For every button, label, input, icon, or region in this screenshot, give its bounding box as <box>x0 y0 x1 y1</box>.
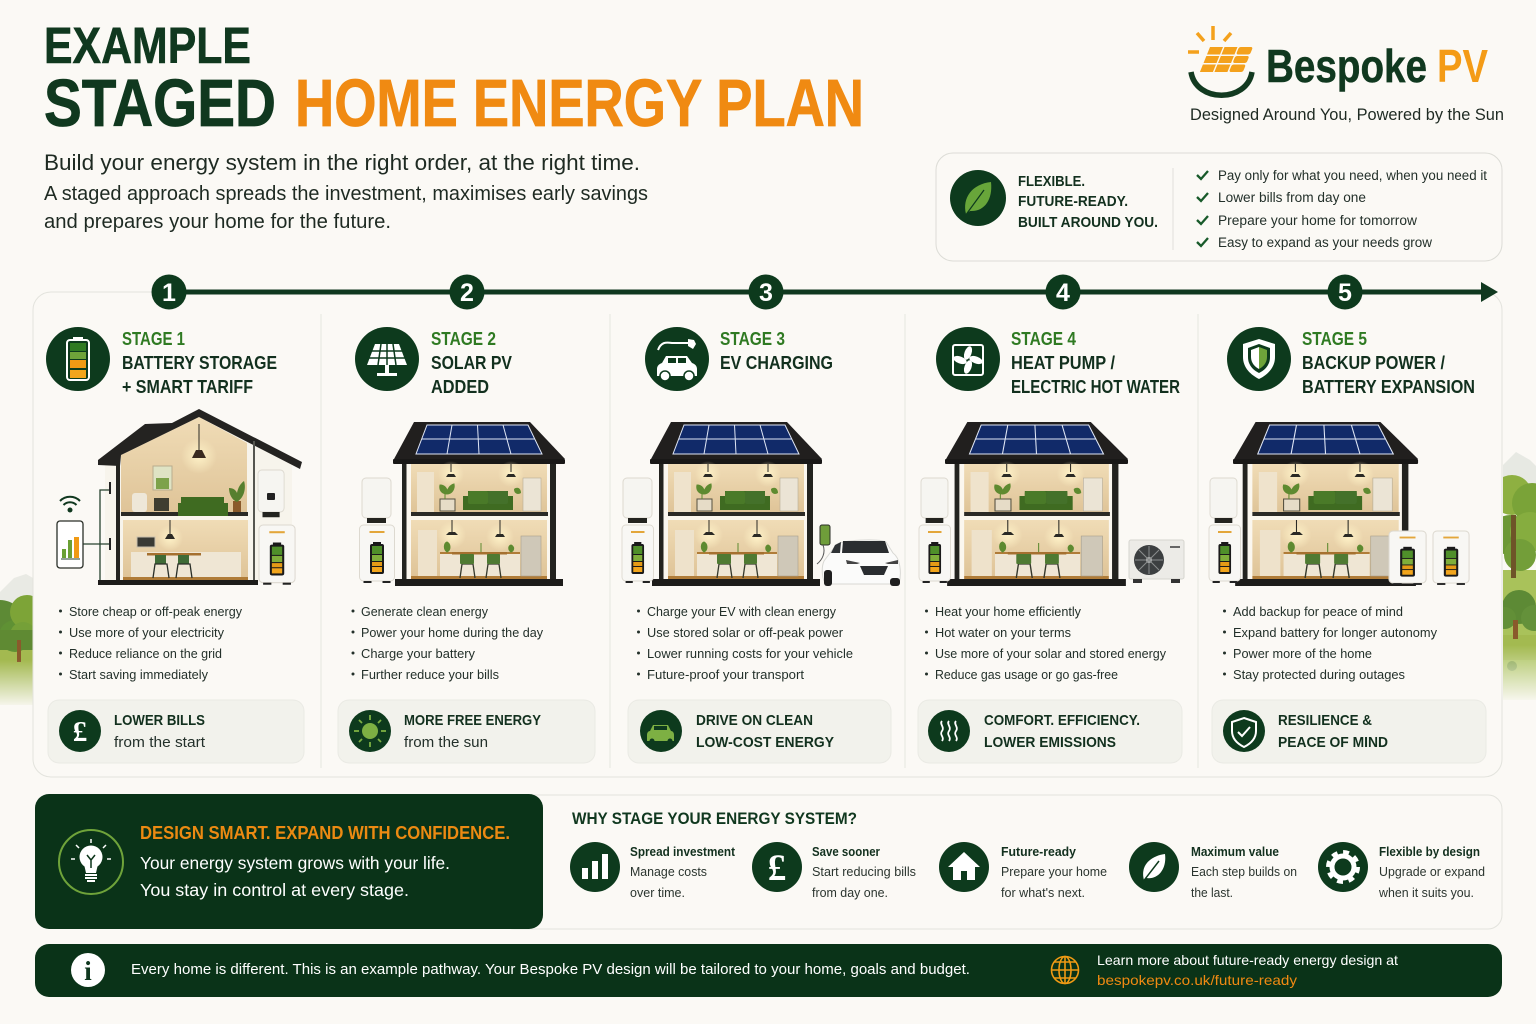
disclaimer text: Every home is different. This is an example pathway. Your Bespoke PV design will be tailored to your home, goals and budget. <box>131 961 970 978</box>
panel: stage 2 <box>338 327 595 763</box>
item: save sooner: Start reducing bills <box>812 865 916 879</box>
callout text: You stay in control at every stage. <box>140 880 409 900</box>
bullet list: Hot water on your terms <box>935 625 1071 640</box>
title: STAGED <box>44 66 276 141</box>
item: spread investment: Spread investment <box>630 845 736 859</box>
benefit: lower bills: LOWER BILLS <box>114 712 205 729</box>
item: save sooner: from day one. <box>812 886 888 900</box>
item: flexible by design <box>1318 842 1485 900</box>
bullet list <box>925 604 1166 682</box>
item: maximum value: the last. <box>1191 886 1233 900</box>
bullet list <box>59 604 242 682</box>
illustration: solar house with extra batteries <box>1209 422 1469 586</box>
benefit: comfort: LOWER EMISSIONS <box>984 734 1116 751</box>
timeline arrow: 2 <box>460 279 474 307</box>
heading: + SMART TARIFF <box>122 377 253 397</box>
bullet list <box>352 604 543 682</box>
icon: info <box>71 953 105 987</box>
icon: EV and charger <box>645 327 709 391</box>
bullet list: Lower running costs for your vehicle <box>647 646 853 661</box>
heading: BATTERY STORAGE <box>122 353 277 373</box>
benefit: lower bills: £ <box>73 716 87 748</box>
heading: STAGE 2 <box>431 329 496 349</box>
icon: solar panel <box>355 327 419 391</box>
item: save sooner: £ <box>768 848 786 889</box>
bullet list: Use stored solar or off-peak power <box>647 625 844 640</box>
benefit: drive on clean <box>628 700 891 763</box>
bullet list <box>1223 604 1437 682</box>
checklist: Pay only for what you need, when you need it <box>1218 168 1487 183</box>
checklist: Easy to expand as your needs grow <box>1218 235 1432 250</box>
benefit: resilience: RESILIENCE & <box>1278 712 1372 729</box>
heading: STAGE 1 <box>122 329 185 349</box>
intro text: and prepares your home for the future. <box>44 210 391 233</box>
landscape: left trees <box>0 574 32 705</box>
bullet list: Reduce reliance on the grid <box>69 646 222 661</box>
heading <box>1011 329 1180 397</box>
bullet list: Expand battery for longer autonomy <box>1233 625 1437 640</box>
intro text: Build your energy system in the right order, at the right time. <box>44 150 640 175</box>
bullet list: Start saving immediately <box>69 667 208 682</box>
heading: WHY STAGE YOUR ENERGY SYSTEM? <box>572 809 857 828</box>
timeline arrow <box>152 274 1498 310</box>
benefit: comfort: COMFORT. EFFICIENCY. <box>984 712 1140 729</box>
item: future-ready <box>939 842 1107 900</box>
benefit: comfort <box>918 700 1182 763</box>
benefit: resilience <box>1212 700 1486 763</box>
callout heading: BUILT AROUND YOU. <box>1018 214 1158 231</box>
benefit: more free energy: MORE FREE ENERGY <box>404 712 541 729</box>
heading: STAGE 5 <box>1302 329 1367 349</box>
item: flexible by design: Flexible by design <box>1379 845 1480 859</box>
heading: ADDED <box>431 377 489 397</box>
callout text <box>140 823 510 900</box>
panel: stages container <box>33 292 1502 777</box>
icon: smartphone with charts <box>57 497 83 568</box>
website link text: Learn more about future-ready energy design at <box>1097 952 1398 968</box>
icon: wall charger <box>817 525 830 564</box>
title: EXAMPLE <box>44 17 251 74</box>
bullet list <box>637 604 853 682</box>
bullet list: Heat your home efficiently <box>935 604 1081 619</box>
item: spread investment: Manage costs <box>630 865 707 879</box>
heading: STAGE 4 <box>1011 329 1076 349</box>
item: future-ready: for what's next. <box>1001 886 1085 900</box>
icon: white car <box>822 540 900 586</box>
panel: stage 4 <box>918 327 1184 763</box>
checklist: Prepare your home for tomorrow <box>1218 213 1417 228</box>
icon: globe <box>1052 956 1078 984</box>
item: maximum value: Maximum value <box>1191 845 1279 859</box>
item: spread investment: over time. <box>630 886 685 900</box>
item: spread investment <box>570 842 736 900</box>
item: maximum value <box>1129 842 1297 900</box>
panel: why stage <box>500 795 1502 929</box>
item: maximum value: Each step builds on <box>1191 865 1297 879</box>
illustration: solar house with battery <box>360 422 565 586</box>
benefit: drive on clean: LOW-COST ENERGY <box>696 734 834 751</box>
tagline: Designed Around You, Powered by the Sun <box>1190 106 1504 124</box>
logo <box>1188 26 1504 124</box>
checklist: Lower bills from day one <box>1218 190 1366 205</box>
illustration: gable house with battery and app <box>57 409 302 585</box>
benefit: lower bills <box>48 700 304 763</box>
illustration: solar house with heat pump <box>919 422 1184 586</box>
illustration: solar house with EV <box>622 422 900 586</box>
bullet list: Charge your EV with clean energy <box>647 604 836 619</box>
heading: ELECTRIC HOT WATER <box>1011 377 1180 397</box>
icon: outdoor heat pump unit <box>1129 540 1184 583</box>
callout text: DESIGN SMART. EXPAND WITH CONFIDENCE. <box>140 823 510 843</box>
icon: shield <box>1227 327 1291 391</box>
bullet list: Stay protected during outages <box>1233 667 1405 682</box>
website link text <box>1097 952 1398 988</box>
item: flexible by design: Upgrade or expand <box>1379 865 1485 879</box>
item: future-ready: Prepare your home <box>1001 865 1107 879</box>
bullet list: Further reduce your bills <box>361 667 499 682</box>
heading <box>431 329 512 397</box>
timeline arrow: 3 <box>759 279 773 307</box>
wordmark: Bespoke <box>1266 40 1427 92</box>
benefit: resilience: PEACE OF MIND <box>1278 734 1388 751</box>
item: save sooner <box>752 842 916 900</box>
timeline arrow: 1 <box>162 279 176 307</box>
benefit: lower bills: from the start <box>114 734 206 751</box>
item: save sooner: Save sooner <box>812 845 880 859</box>
bullet list: Charge your battery <box>361 646 475 661</box>
callout heading: FLEXIBLE. <box>1018 173 1085 190</box>
logo: PV <box>1437 40 1488 92</box>
callout heading: FUTURE-READY. <box>1018 193 1128 210</box>
bullet list: Use more of your electricity <box>69 625 224 640</box>
item: future-ready: Future-ready <box>1001 845 1076 859</box>
icon: info: i <box>84 956 92 986</box>
benefit: more free energy: from the sun <box>404 734 488 751</box>
checklist <box>1197 168 1487 250</box>
bullet list: Add backup for peace of mind <box>1233 604 1403 619</box>
intro text: A staged approach spreads the investment, maximises early savings <box>44 182 648 205</box>
timeline arrow: 4 <box>1056 279 1070 307</box>
panel: footer bar <box>35 944 1502 997</box>
bullet list: Generate clean energy <box>361 604 488 619</box>
bullet list: Power your home during the day <box>361 625 543 640</box>
bullet list: Use more of your solar and stored energy <box>935 646 1166 661</box>
bullet list: Future-proof your transport <box>647 667 804 682</box>
icon: leaf <box>950 170 1006 226</box>
icon: light bulb <box>59 830 123 894</box>
heading: BATTERY EXPANSION <box>1302 377 1475 397</box>
heading <box>122 329 277 397</box>
callout heading <box>1018 173 1158 231</box>
heading: BACKUP POWER / <box>1302 353 1445 373</box>
icon: sun and solar panel <box>1188 26 1253 95</box>
panel: design smart <box>35 794 543 929</box>
bullet list: Power more of the home <box>1233 646 1372 661</box>
heading: SOLAR PV <box>431 353 512 373</box>
heading <box>1302 329 1475 397</box>
bullet list: Reduce gas usage or go gas-free <box>935 667 1118 682</box>
heading: EV CHARGING <box>720 353 833 373</box>
timeline arrow: 5 <box>1338 279 1352 307</box>
intro text <box>44 150 648 233</box>
title <box>44 17 864 141</box>
heading: HEAT PUMP / <box>1011 353 1115 373</box>
heading <box>720 329 833 373</box>
landscape: right trees <box>1503 452 1536 700</box>
panel: stage 1 <box>46 327 304 763</box>
website link text: bespokepv.co.uk/future-ready <box>1097 972 1297 988</box>
icon: heat pump fan <box>936 327 1000 391</box>
panel: stage 3 <box>622 327 900 763</box>
benefit: more free energy <box>338 700 595 763</box>
title: HOME ENERGY PLAN <box>295 66 864 141</box>
bullet list: Store cheap or off-peak energy <box>69 604 242 619</box>
callout text: Your energy system grows with your life. <box>140 853 450 873</box>
panel: stage 5 <box>1209 327 1486 763</box>
panel: flexible callout <box>936 153 1502 261</box>
benefit: drive on clean: DRIVE ON CLEAN <box>696 712 813 729</box>
item: flexible by design: when it suits you. <box>1378 886 1474 900</box>
icon: battery <box>46 327 110 391</box>
heading: STAGE 3 <box>720 329 785 349</box>
